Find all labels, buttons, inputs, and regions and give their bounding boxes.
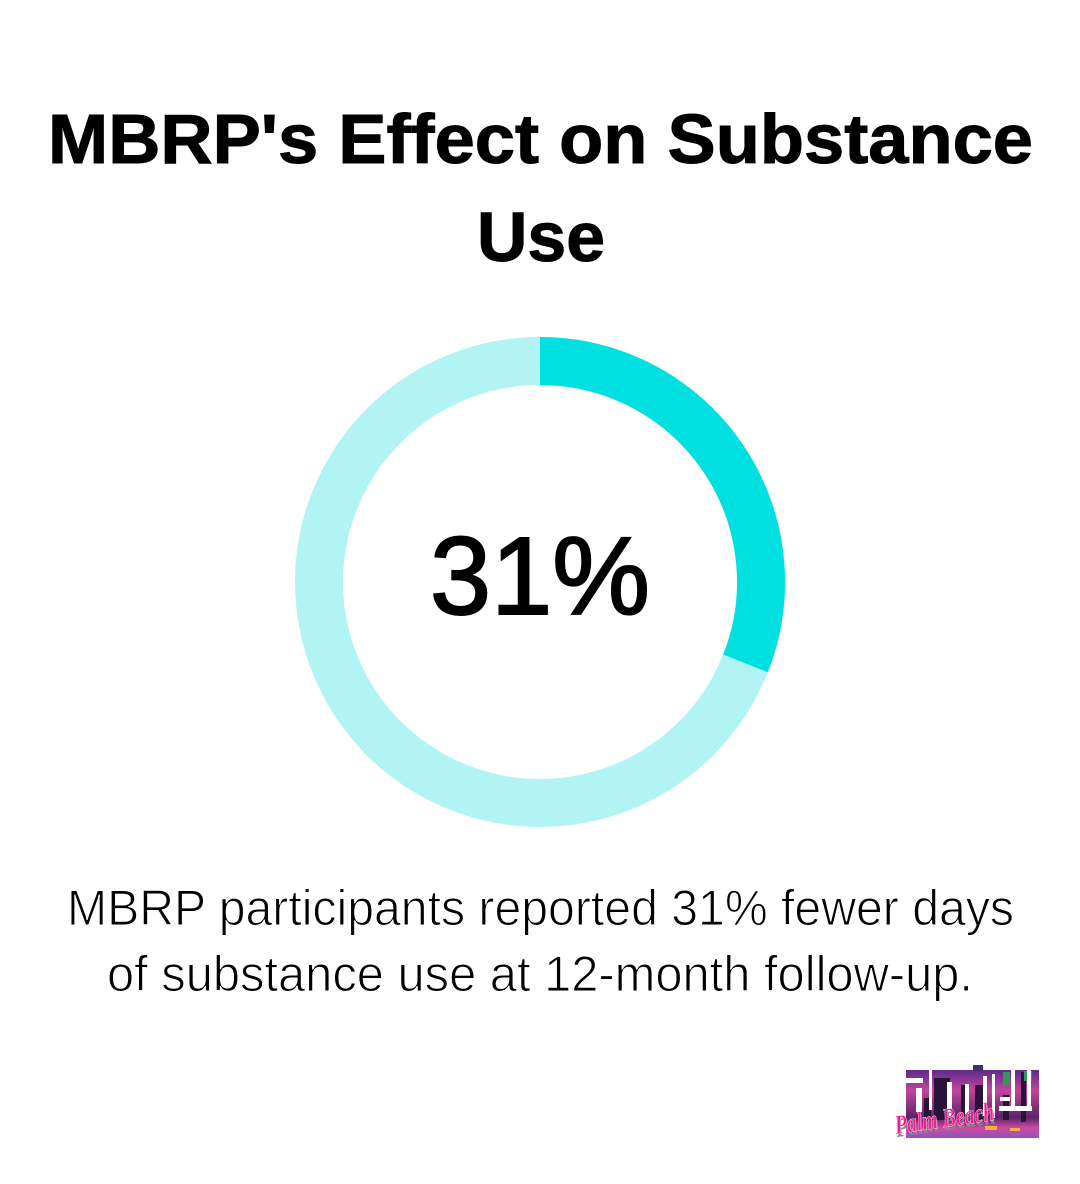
title: MBRP's Effect on Substance xyxy=(48,100,1033,178)
logo script shadow: Palm Beach xyxy=(893,1099,997,1143)
logo: amity Palm Beach xyxy=(892,1065,1039,1143)
donut track xyxy=(319,361,761,803)
title: Use xyxy=(477,198,605,276)
description text: of substance use at 12-month follow-up. xyxy=(107,946,973,1002)
center value: 31% xyxy=(430,515,650,638)
logo letter cutouts xyxy=(906,1070,1032,1118)
description text xyxy=(67,880,1014,1002)
logo script text: Palm Beach xyxy=(892,1096,996,1140)
logo water reflections xyxy=(985,1126,1020,1131)
description text: MBRP participants reported 31% fewer days xyxy=(67,880,1014,936)
logo skyline xyxy=(924,1072,1026,1122)
donut value arc xyxy=(540,361,761,663)
logo palm foliage xyxy=(1003,1071,1032,1086)
title xyxy=(48,100,1033,276)
donut chart: 31% xyxy=(319,361,761,803)
logo city image block xyxy=(906,1070,1039,1138)
logo i dot extension xyxy=(973,1065,983,1071)
